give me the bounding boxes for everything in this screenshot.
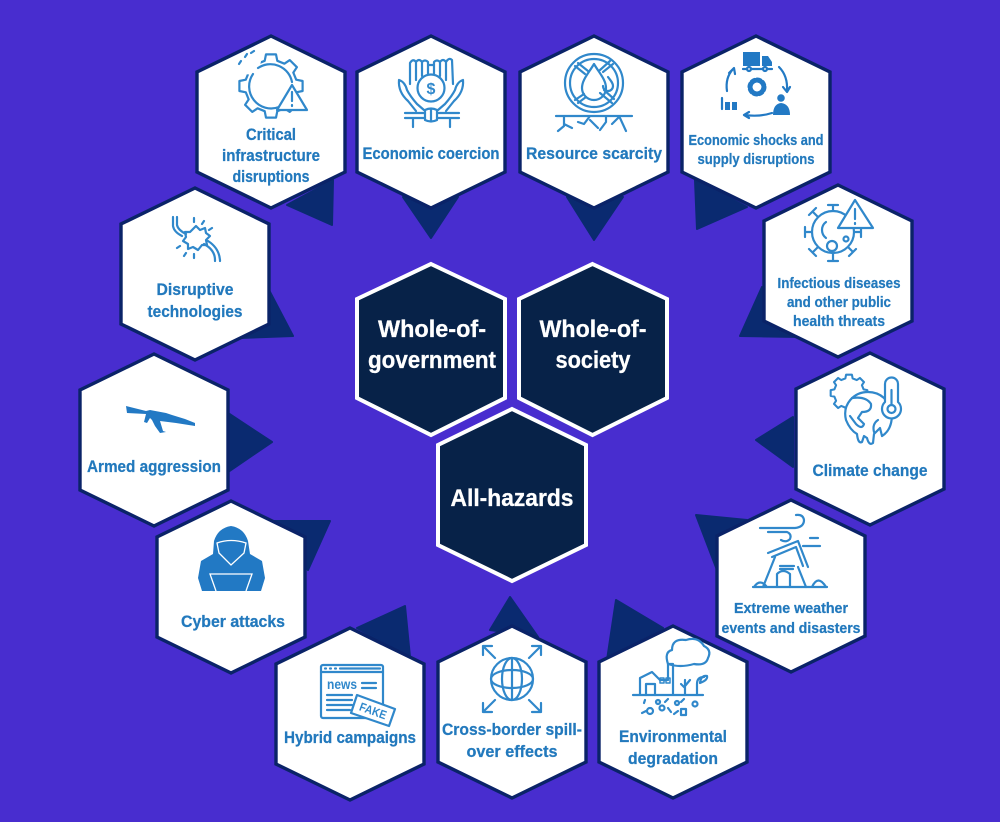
icon: crossed-out water drop with dry roots bbox=[556, 54, 632, 131]
label: society bbox=[556, 347, 631, 374]
label: Whole-of- bbox=[378, 316, 486, 343]
label: health threats bbox=[793, 313, 885, 330]
label bbox=[722, 600, 860, 637]
icon text: fake stamp: FAKE bbox=[357, 700, 389, 722]
icon: storm-damaged house bbox=[753, 515, 827, 587]
label: Cyber attacks bbox=[181, 613, 285, 631]
label: Extreme weather bbox=[734, 600, 848, 617]
icon: polluting factory bbox=[633, 639, 709, 715]
panel: climate change bbox=[756, 353, 944, 525]
label bbox=[619, 728, 727, 768]
panel: disruptive technologies bbox=[121, 188, 293, 360]
label bbox=[222, 126, 320, 186]
label: Resource scarcity bbox=[526, 145, 663, 163]
label bbox=[442, 721, 582, 761]
label: Environmental bbox=[619, 728, 727, 746]
label: government bbox=[368, 347, 496, 374]
label: disruptions bbox=[232, 168, 310, 186]
icon: hands holding coin bbox=[399, 59, 463, 127]
icon: assault rifle bbox=[126, 406, 195, 433]
label: technologies bbox=[148, 303, 242, 321]
label bbox=[540, 316, 646, 374]
icon: broken cable burst bbox=[173, 217, 220, 261]
icon: virus with warning bbox=[805, 200, 873, 261]
icon: fake news browser window bbox=[321, 665, 395, 726]
icon: globe with outward arrows bbox=[483, 646, 541, 712]
label: events and disasters bbox=[722, 620, 860, 637]
label: All-hazards bbox=[450, 485, 574, 512]
panel: armed aggression bbox=[80, 354, 272, 526]
coin dollar sign: $ bbox=[427, 81, 436, 98]
label: Whole-of- bbox=[540, 316, 646, 343]
label: Critical bbox=[246, 126, 296, 144]
label: Climate change bbox=[812, 462, 928, 480]
panel: economic coercion bbox=[357, 36, 505, 238]
label: Hybrid campaigns bbox=[284, 729, 416, 747]
panel: critical infrastructure disruptions bbox=[197, 36, 345, 225]
icon: supply chain cycle bbox=[722, 52, 790, 118]
icon: melting globe, sun and thermometer bbox=[831, 375, 901, 444]
panel: whole-of-government bbox=[357, 264, 505, 435]
label bbox=[688, 132, 824, 168]
label: Infectious diseases bbox=[778, 275, 900, 292]
panel: hybrid campaigns bbox=[276, 606, 424, 800]
panel: extreme weather events and disasters bbox=[696, 500, 865, 672]
label: over effects bbox=[466, 743, 558, 761]
label: Cross-border spill- bbox=[442, 721, 582, 739]
label: degradation bbox=[628, 750, 718, 768]
label bbox=[778, 275, 900, 330]
label: Economic shocks and bbox=[688, 132, 824, 149]
label bbox=[148, 281, 242, 321]
icon: hooded hacker bbox=[198, 526, 265, 591]
icon: broken gear with warning bbox=[239, 51, 307, 118]
icon text: news: news bbox=[327, 676, 357, 692]
panel: environmental degradation bbox=[599, 600, 747, 798]
label: infrastructure bbox=[222, 147, 320, 165]
panel: whole-of-society bbox=[519, 264, 667, 435]
label: Economic coercion bbox=[362, 145, 500, 163]
panel: resource scarcity bbox=[520, 36, 668, 240]
label: supply disruptions bbox=[698, 151, 814, 168]
label bbox=[368, 316, 496, 374]
label: Armed aggression bbox=[87, 458, 221, 476]
panel: all-hazards bbox=[438, 409, 586, 581]
panel: cyber attacks bbox=[157, 501, 330, 673]
panel: economic shocks and supply disruptions bbox=[682, 36, 830, 229]
label: Disruptive bbox=[156, 281, 234, 299]
label: and other public bbox=[787, 294, 891, 311]
panel: cross-border spill-over effects bbox=[438, 597, 586, 798]
panel: infectious diseases bbox=[740, 185, 912, 357]
